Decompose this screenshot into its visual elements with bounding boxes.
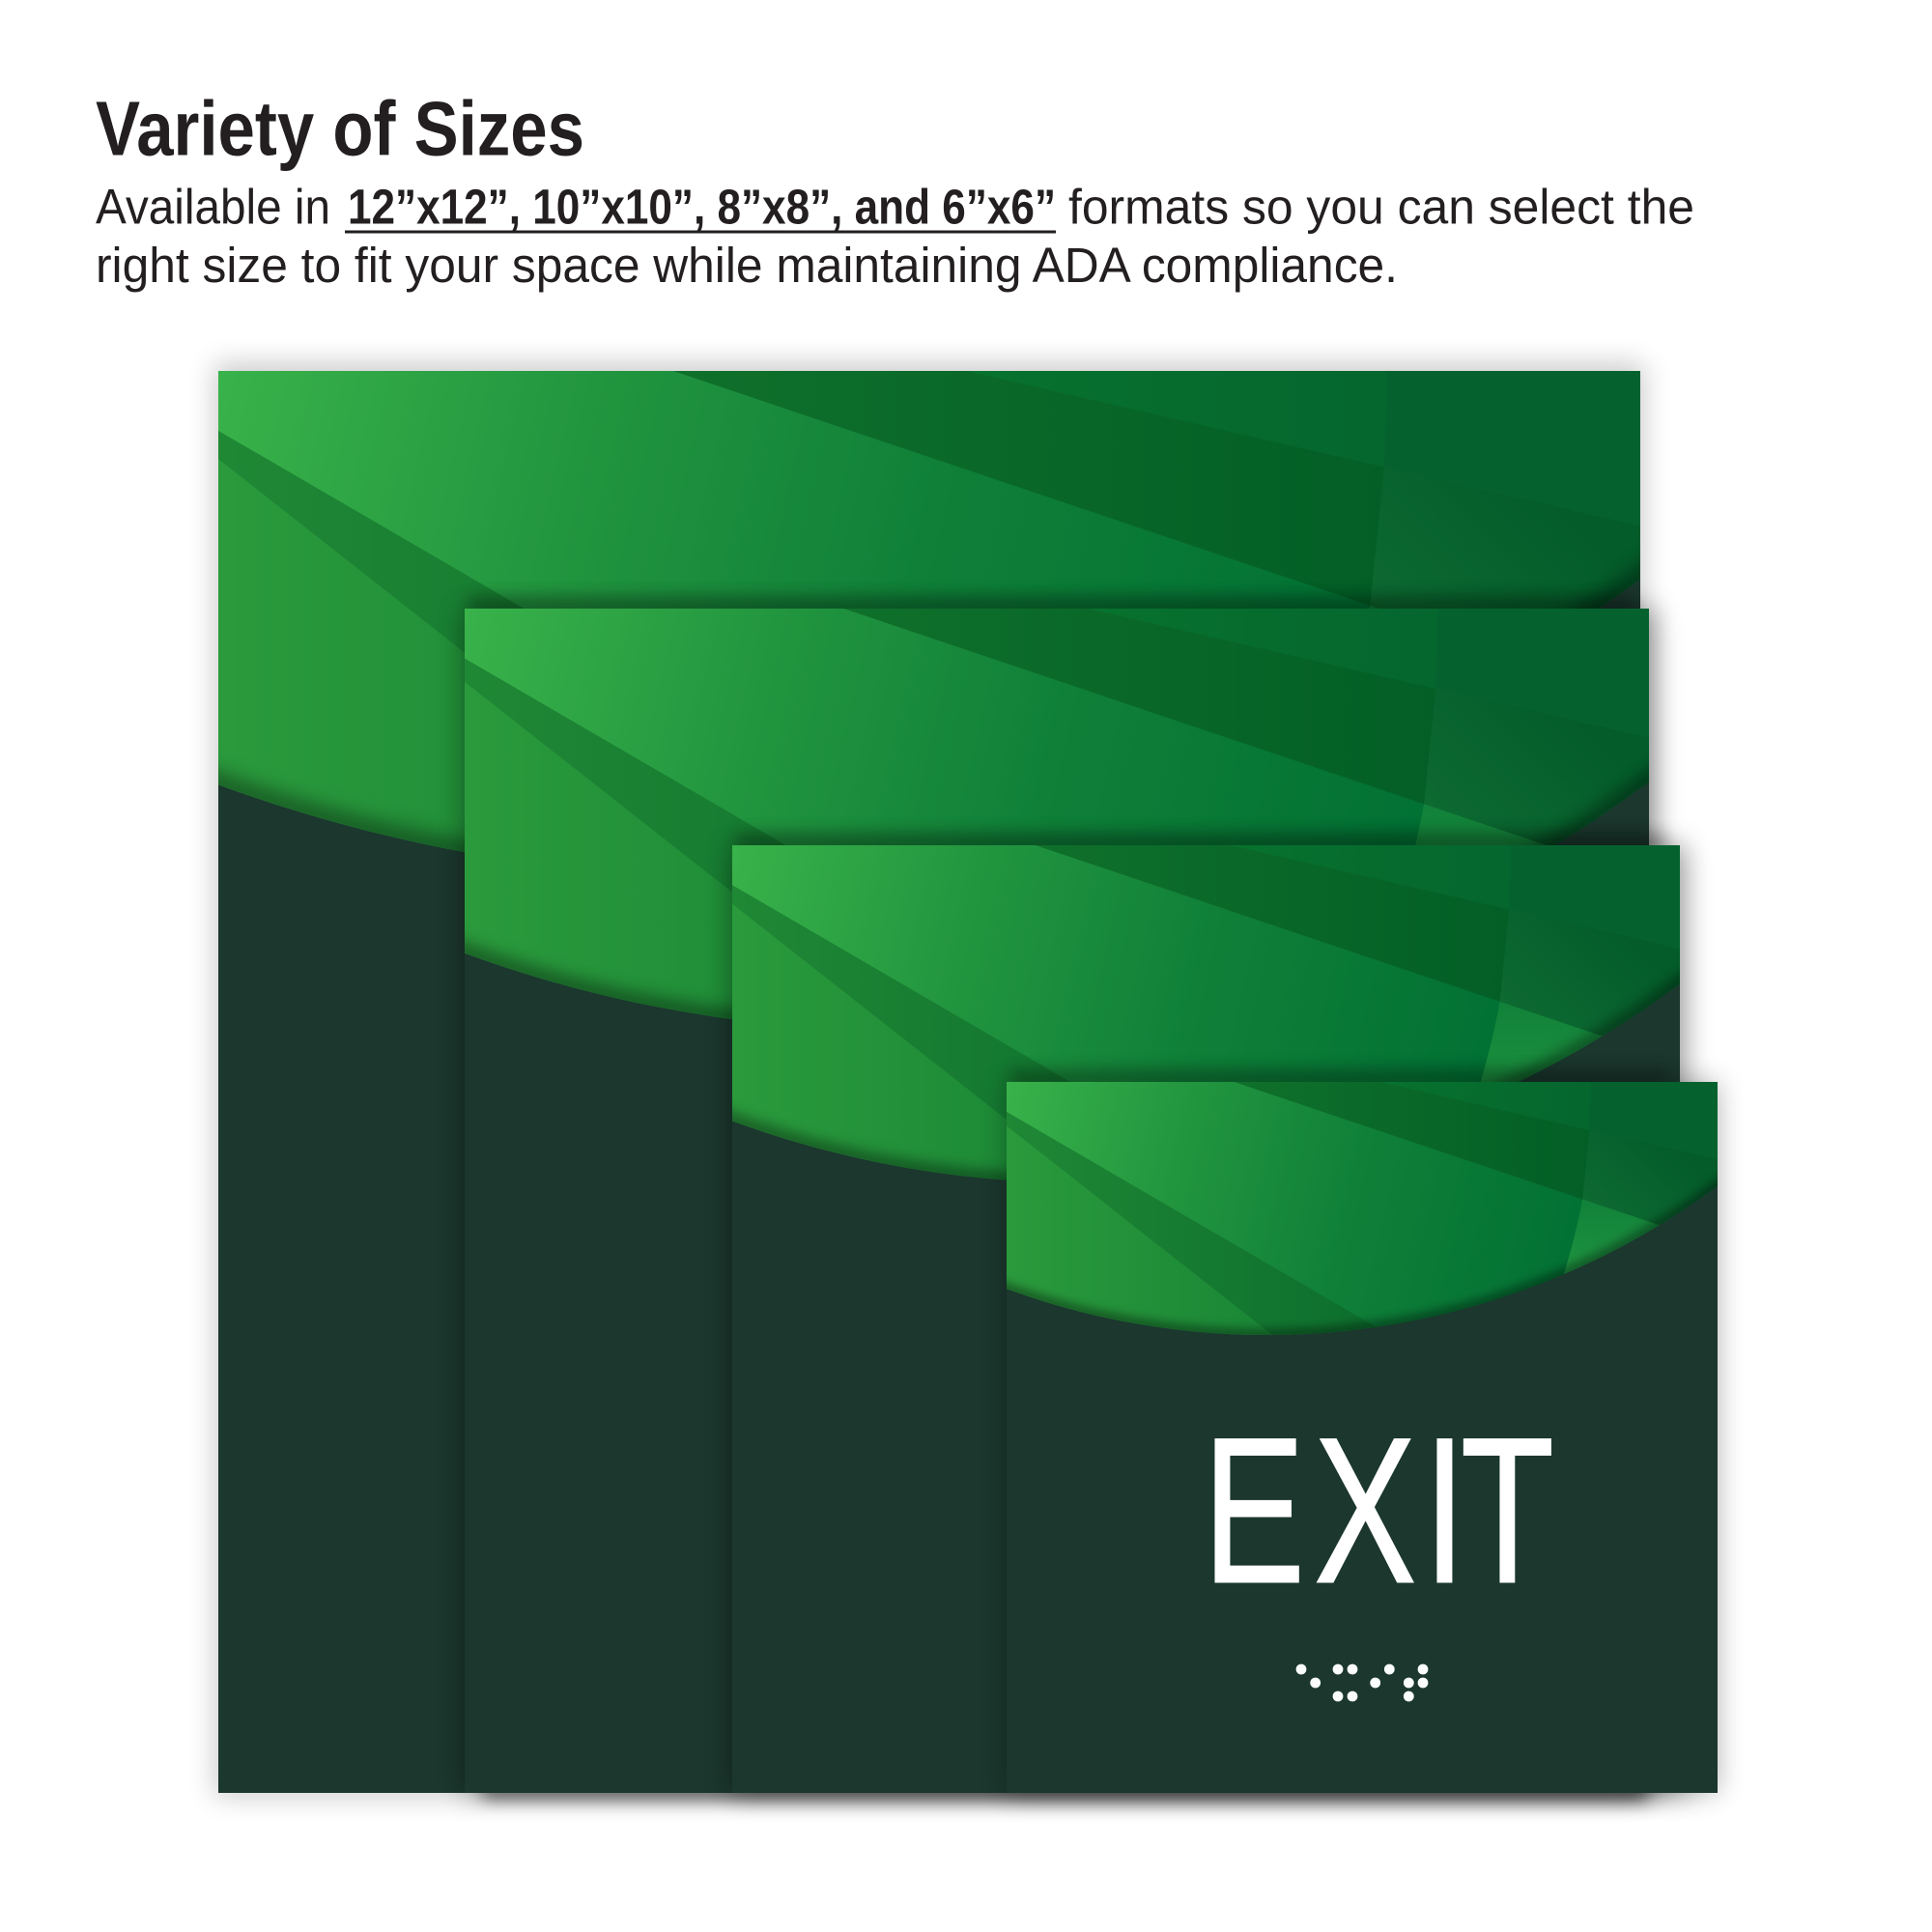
text block: description: 12”x12”, 10”x10”, 8”x8”, and 6”x6” [348, 180, 1056, 234]
sign: 6x6 with EXIT [511, 0, 1932, 1793]
title: Variety of Sizes [96, 85, 584, 172]
text block: description: right size to fit your space while maintaining ADA compliance. [96, 238, 1398, 293]
text block: description: formats so you can select the [1068, 180, 1694, 234]
sign label: EXIT: EXIT [1203, 1395, 1554, 1627]
text block: description: Available in [96, 180, 330, 234]
icon: braille dots [1296, 1664, 1428, 1701]
text block: description [96, 180, 1694, 293]
shadow: bottom of sign stack [483, 1785, 1647, 1799]
